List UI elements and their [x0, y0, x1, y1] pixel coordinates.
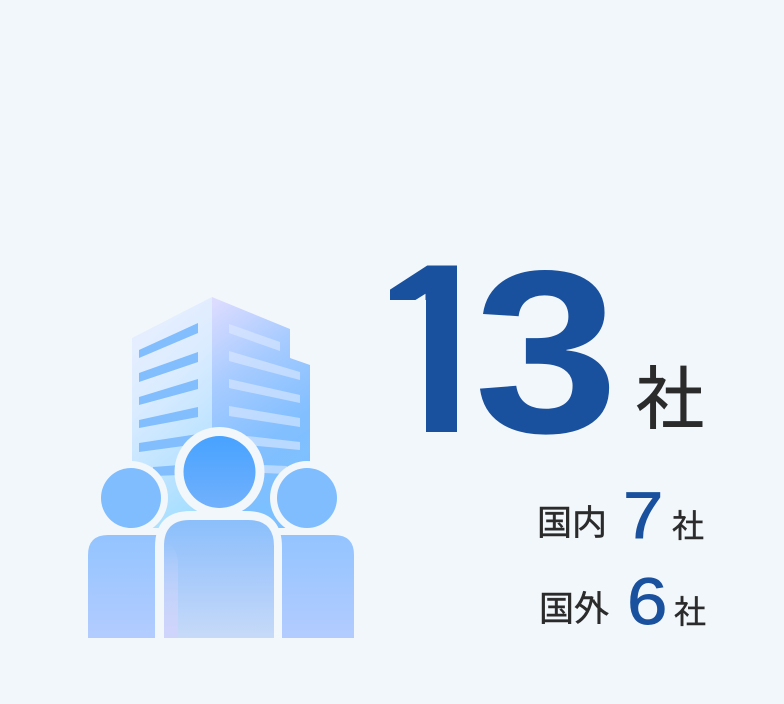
person: center: [155, 427, 282, 638]
person: left: [88, 461, 310, 638]
total count: 13: 1: [369, 214, 504, 484]
overseas count row: 社: [674, 594, 706, 630]
building: right windows: [229, 324, 300, 474]
unit: 社 large: 社: [636, 362, 704, 438]
domestic count row: [537, 478, 704, 552]
building: left windows: [139, 323, 198, 476]
icon: office building with three people: [88, 297, 354, 638]
building: right face: [212, 297, 310, 528]
domestic count row: 社: [672, 508, 704, 544]
total count: 13: 3: [474, 223, 619, 482]
person: right: [270, 461, 354, 638]
overseas count row: [539, 564, 706, 638]
domestic count row: 7: [623, 478, 663, 552]
overseas count row: 6: [627, 564, 667, 638]
building: left face: [132, 297, 212, 528]
total count: 13: [390, 266, 610, 435]
domestic count row: 国内: [537, 504, 607, 543]
overseas count row: 国外: [539, 590, 609, 629]
